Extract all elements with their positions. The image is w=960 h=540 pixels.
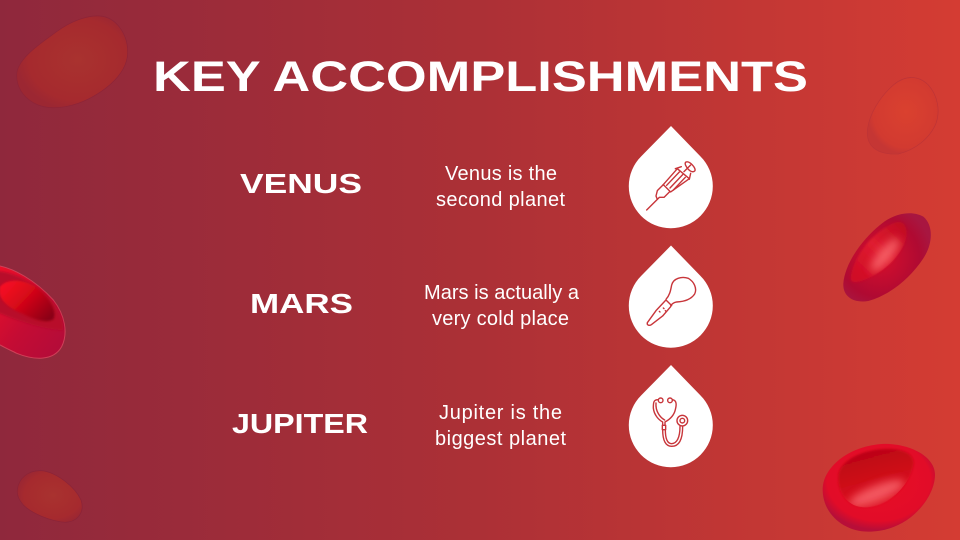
- text: Jupiter description: Jupiter is the: [439, 402, 562, 424]
- text: Mars description: [424, 282, 580, 330]
- row: Venus: [240, 126, 713, 228]
- text: Mars description: Mars is actually a: [424, 282, 580, 304]
- blood cell: left edge: [0, 265, 65, 358]
- heading: Mars: MARS: [250, 288, 353, 319]
- title: KEY ACCOMPLISHMENTS: [153, 53, 808, 101]
- text: Venus description: second planet: [436, 189, 565, 211]
- blood cell: top left: [17, 16, 128, 108]
- icon: drop with dropper bulb: [629, 246, 713, 348]
- blood cell: bottom left: [17, 471, 82, 522]
- blood cell: bottom right: [823, 444, 935, 532]
- text: Venus description: Venus is the: [445, 163, 557, 185]
- blood cell: top right: [867, 77, 938, 154]
- row: Jupiter: [232, 365, 713, 467]
- text: Mars description: very cold place: [432, 308, 569, 330]
- text: Venus description: [436, 163, 565, 211]
- blood cell: right middle: [843, 213, 931, 301]
- icon: drop with syringe: [629, 126, 713, 228]
- heading: Venus: VENUS: [240, 168, 362, 199]
- heading: Jupiter: JUPITER: [232, 408, 368, 439]
- text: Jupiter description: [435, 402, 566, 450]
- icon: drop with stethoscope: [629, 365, 713, 467]
- text: Jupiter description: biggest planet: [435, 428, 566, 450]
- row: Mars: [250, 246, 713, 348]
